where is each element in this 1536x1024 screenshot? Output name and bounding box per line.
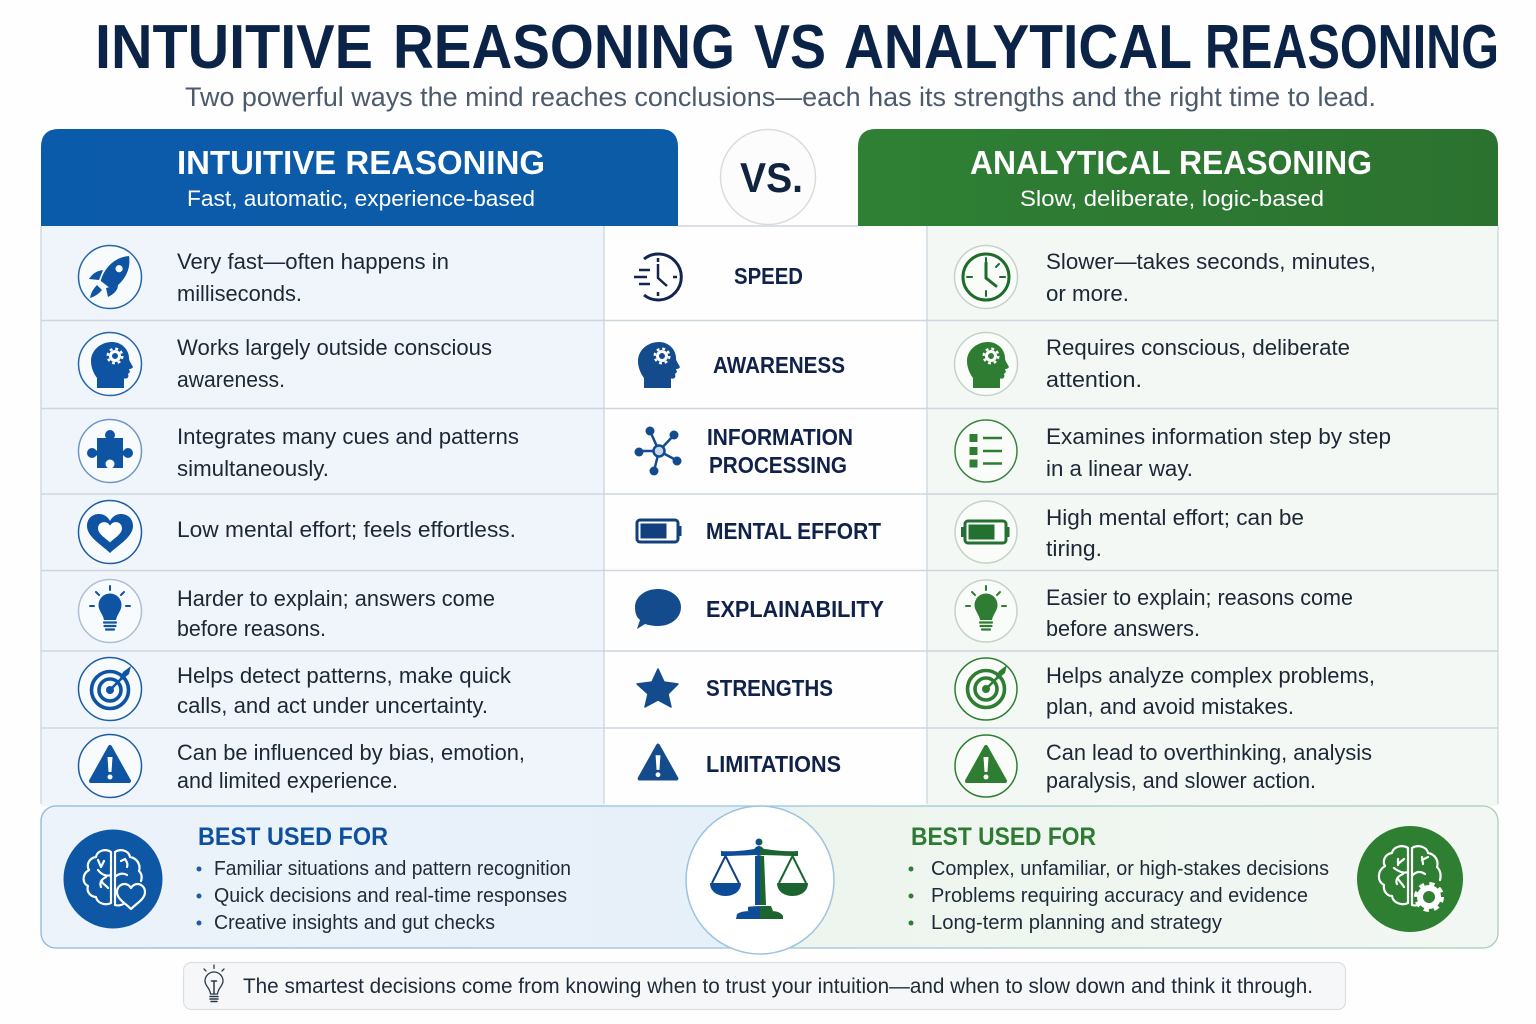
icon: warning triangle xyxy=(78,734,142,798)
text: intuitive speed: Very fast—often happens in xyxy=(177,249,449,274)
text: intuitive information processing: simultaneously. xyxy=(177,456,329,481)
title: REASONING xyxy=(393,13,735,82)
icon: rocket xyxy=(78,246,142,308)
label: limitations: LIMITATIONS xyxy=(706,751,841,777)
text: analytical strengths: plan, and avoid mistakes. xyxy=(1046,694,1294,719)
text: intuitive strengths xyxy=(177,663,512,718)
list: intuitive best uses: Quick decisions and real-time responses xyxy=(214,885,567,907)
icon: target xyxy=(78,658,142,720)
text: intuitive information processing: Integrates many cues and patterns xyxy=(177,424,519,449)
icon: speed clock xyxy=(634,254,681,300)
icon: star xyxy=(637,669,678,707)
list: intuitive best uses: Creative insights and gut checks xyxy=(214,912,495,934)
list: analytical best uses: Problems requiring accuracy and evidence xyxy=(931,885,1308,907)
heading: best used for intuitive: BEST USED FOR xyxy=(198,823,388,851)
list: analytical best uses xyxy=(908,858,1329,934)
icon: balance scale xyxy=(686,806,834,954)
text: intuitive speed: milliseconds. xyxy=(177,281,302,306)
icon: checklist xyxy=(955,420,1017,482)
panel: table backgrounds xyxy=(41,226,1498,806)
text: analytical limitations: paralysis, and slower action. xyxy=(1046,768,1316,793)
title xyxy=(95,13,1499,82)
text: analytical explainability: Easier to explain; reasons come xyxy=(1046,585,1353,610)
row: information processing xyxy=(78,420,1391,482)
title: INTUITIVE xyxy=(95,13,373,82)
text: analytical information processing: in a linear way. xyxy=(1046,456,1193,481)
text: intuitive explainability: before reasons. xyxy=(177,616,326,641)
heading: analytical reasoning: ANALYTICAL REASONING xyxy=(970,144,1372,181)
icon: puzzle piece xyxy=(78,420,142,482)
icon: analytical target xyxy=(955,658,1017,720)
text: analytical awareness xyxy=(1046,335,1350,392)
text: intuitive awareness: awareness. xyxy=(177,367,285,392)
row: speed xyxy=(78,246,1376,308)
text: analytical mental effort xyxy=(1046,505,1304,561)
text: intuitive limitations: and limited experience. xyxy=(177,768,398,793)
text: intuitive limitations xyxy=(177,740,525,793)
label: information processing xyxy=(707,424,853,478)
icon: battery xyxy=(637,520,682,542)
panel: intuitive reasoning header xyxy=(41,129,678,226)
text: intuitive speed xyxy=(177,249,449,306)
label: speed: SPEED xyxy=(734,263,803,289)
text: analytical speed xyxy=(1046,249,1376,306)
list: analytical best uses: Complex, unfamiliar, or high-stakes decisions xyxy=(931,858,1329,880)
row: limitations xyxy=(78,734,1372,798)
heading: intuitive reasoning: INTUITIVE REASONING xyxy=(177,144,545,181)
text: analytical strengths xyxy=(1046,663,1375,719)
text: analytical mental effort: tiring. xyxy=(1046,536,1102,561)
icon: analytical head xyxy=(954,332,1018,396)
list: intuitive best uses xyxy=(196,858,571,934)
row: mental effort xyxy=(78,500,1304,564)
title: VS xyxy=(754,13,826,82)
icon: brain with gear xyxy=(1357,826,1463,932)
label: information processing: PROCESSING xyxy=(709,452,847,478)
row: explainability xyxy=(78,580,1353,642)
heading: best used for analytical: BEST USED FOR xyxy=(911,823,1096,851)
vs badge: VS. xyxy=(740,154,803,201)
label: awareness: AWARENESS xyxy=(713,352,845,378)
text: analytical awareness: attention. xyxy=(1046,367,1142,392)
list: intuitive best uses: Familiar situations and pattern recognition xyxy=(214,858,571,880)
panel: analytical reasoning header xyxy=(858,129,1498,226)
text: intuitive strengths: calls, and act under uncertainty. xyxy=(177,693,488,718)
label: information processing: INFORMATION xyxy=(707,424,853,450)
text: intuitive information processing xyxy=(177,424,519,481)
vs badge xyxy=(720,130,816,224)
text: intuitive mental effort: Low mental effort; feels effortless. xyxy=(177,517,516,542)
text: analytical information processing xyxy=(1046,424,1391,481)
icon: awareness head xyxy=(638,342,680,388)
callout: takeaway xyxy=(184,962,1346,1010)
text: intuitive strengths: Helps detect patterns, make quick xyxy=(177,663,512,688)
icon: analytical warning xyxy=(955,735,1017,797)
text: intuitive awareness xyxy=(177,335,492,392)
icon: head with gear xyxy=(78,332,142,396)
text: analytical speed: Slower—takes seconds, minutes, xyxy=(1046,249,1376,274)
label: mental effort: MENTAL EFFORT xyxy=(706,518,881,544)
text: takeaway: The smartest decisions come from knowing when to trust your intuition—and when to slow down and think it through. xyxy=(243,975,1313,998)
panel: best used for xyxy=(41,806,1498,954)
icon: heart xyxy=(78,500,142,564)
icon: analytical battery xyxy=(955,501,1017,563)
icon: limitations warning xyxy=(640,746,676,779)
subtitle: Two powerful ways the mind reaches conclusions—each has its strengths and the right time to lead. xyxy=(185,82,1376,112)
text: analytical explainability xyxy=(1046,585,1353,641)
icon: outline light bulb xyxy=(204,965,224,1002)
icon: analytical clock xyxy=(954,246,1018,308)
text: intuitive explainability xyxy=(177,586,495,641)
icon: brain with heart xyxy=(64,830,162,928)
title: ANALYTICAL xyxy=(844,13,1192,82)
icon: speech bubble xyxy=(635,589,681,629)
label: strengths: STRENGTHS xyxy=(706,675,833,701)
text: analytical information processing: Examines information step by step xyxy=(1046,424,1391,449)
text: analytical strengths: Helps analyze complex problems, xyxy=(1046,663,1375,688)
text: analytical tagline: Slow, deliberate, logic-based xyxy=(1020,186,1324,211)
row: strengths xyxy=(78,658,1375,720)
text: intuitive awareness: Works largely outside conscious xyxy=(177,335,492,360)
text: intuitive tagline: Fast, automatic, experience-based xyxy=(187,186,535,211)
row: awareness xyxy=(78,332,1350,396)
list: analytical best uses: Long-term planning and strategy xyxy=(931,912,1222,934)
icon: analytical light bulb xyxy=(955,580,1017,642)
text: analytical limitations: Can lead to overthinking, analysis xyxy=(1046,740,1372,765)
text: analytical limitations xyxy=(1046,740,1372,793)
text: intuitive limitations: Can be influenced by bias, emotion, xyxy=(177,740,525,765)
label: explainability: EXPLAINABILITY xyxy=(706,596,884,622)
text: analytical speed: or more. xyxy=(1046,281,1129,306)
text: analytical explainability: before answers. xyxy=(1046,616,1200,641)
icon: network xyxy=(634,426,682,476)
icon: light bulb xyxy=(78,580,142,642)
text: analytical awareness: Requires conscious, deliberate xyxy=(1046,335,1350,360)
text: analytical mental effort: High mental effort; can be xyxy=(1046,505,1304,530)
text: intuitive explainability: Harder to explain; answers come xyxy=(177,586,495,611)
